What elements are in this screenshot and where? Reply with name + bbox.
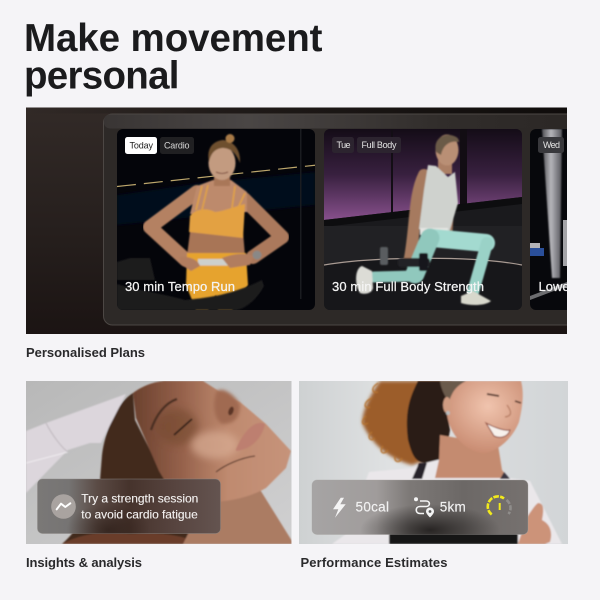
ear and earring <box>443 397 451 413</box>
freckled eye shadow <box>158 409 198 445</box>
icon: trend line <box>51 494 76 519</box>
icon: route <box>414 497 434 518</box>
tag: Today: Today <box>130 140 154 150</box>
card: wednesday <box>530 129 567 310</box>
hair <box>62 393 196 544</box>
panel: personalised plans <box>26 108 600 334</box>
callout text: to avoid cardio fatigue <box>81 508 198 522</box>
smile <box>486 423 510 437</box>
tank top <box>419 165 458 233</box>
apron body <box>389 530 518 544</box>
heading: insights: Insights & analysis <box>26 555 142 570</box>
face <box>133 381 291 502</box>
treadmill console <box>117 280 264 310</box>
sleeve <box>26 394 126 493</box>
tag: Wed <box>538 137 564 153</box>
curly hair, orange outer <box>362 381 452 465</box>
neck and head <box>438 160 452 174</box>
eyes <box>487 394 499 396</box>
tag: Cardio <box>160 137 194 154</box>
head <box>208 146 236 180</box>
title <box>24 17 323 98</box>
eyebrow and eye <box>151 399 177 430</box>
tag: Full Body: Full Body <box>362 140 397 150</box>
callout: insight <box>38 479 220 556</box>
photo: trainer lunging <box>324 129 522 310</box>
card title: 30 min Full Body Strength <box>332 279 484 294</box>
chest <box>190 180 247 214</box>
tag: Tue <box>332 137 354 153</box>
tag: Today <box>125 137 157 154</box>
tag: Tue: Tue <box>336 140 350 150</box>
callout text: Try a strength session <box>81 492 198 506</box>
heading: performance: Performance Estimates <box>300 555 448 570</box>
apron straps <box>412 463 427 479</box>
bottle <box>380 247 388 265</box>
dumbbell <box>398 258 430 267</box>
nose <box>214 390 240 424</box>
card: today cardio <box>117 129 317 310</box>
heading: personalised plans: Personalised Plans <box>26 345 145 360</box>
panel: performance photo <box>299 381 568 544</box>
tag: Wed: Wed <box>543 140 560 150</box>
card title: 30 min Tempo Run <box>125 279 235 294</box>
hand <box>518 503 551 544</box>
panel: insights photo <box>26 381 292 544</box>
tag: Cardio: Cardio <box>164 140 190 150</box>
midriff <box>187 232 245 256</box>
callout text <box>81 492 198 522</box>
leggings <box>186 253 248 310</box>
icon: pace gauge <box>488 496 510 514</box>
title: Make movement <box>24 17 323 60</box>
photo: gym pillar <box>530 129 567 310</box>
title: personal <box>24 54 180 98</box>
shoes <box>356 266 373 294</box>
arm <box>410 175 424 258</box>
jaw strand <box>216 456 255 472</box>
curly hair, dark core <box>407 381 456 463</box>
neck <box>435 435 508 478</box>
tablet frame <box>104 114 600 325</box>
stat: calories: 50cal <box>356 500 389 515</box>
lips <box>236 423 265 451</box>
cheek highlight <box>191 431 239 459</box>
legs <box>432 238 486 243</box>
white top <box>332 454 562 544</box>
card: tuesday full body <box>324 129 522 310</box>
neck <box>213 176 231 186</box>
face <box>445 381 523 453</box>
hair parting <box>440 381 466 402</box>
belt and hands <box>198 259 234 266</box>
nose <box>505 405 511 417</box>
arms <box>150 192 197 260</box>
stat: distance: 5km <box>440 500 466 515</box>
icon: lightning <box>333 498 346 518</box>
photo: trainer in yellow <box>117 129 317 310</box>
neck <box>182 490 292 544</box>
tag: Full Body <box>357 137 401 153</box>
sports bra <box>196 185 245 210</box>
callout: performance stats <box>312 480 528 556</box>
